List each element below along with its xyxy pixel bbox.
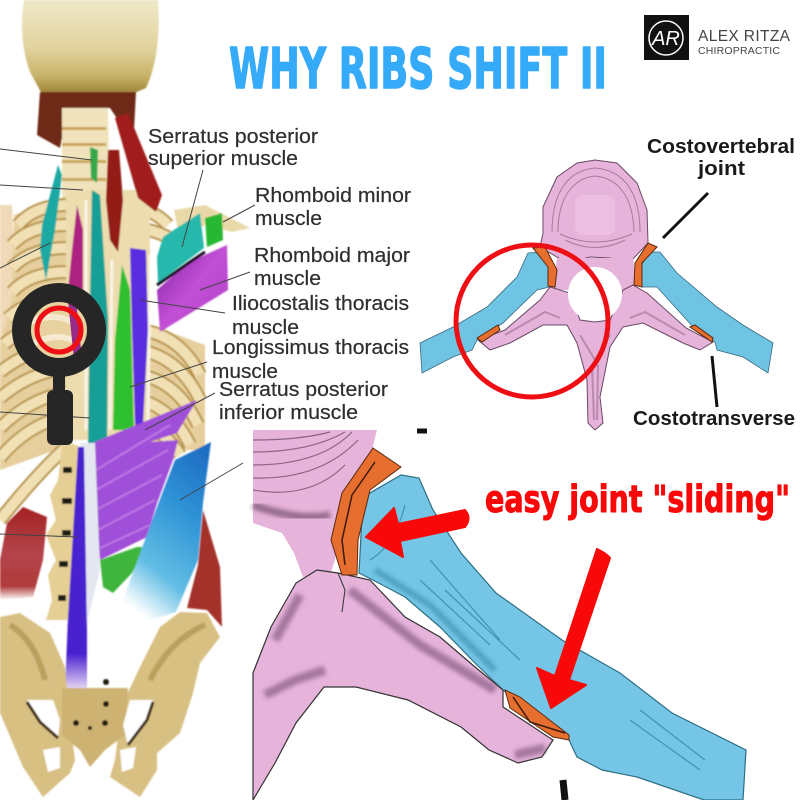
pelvis left: [0, 613, 75, 797]
logo mark: AR: [651, 28, 680, 50]
vertebral body and pedicle: [253, 430, 377, 577]
costotransverse joints: [477, 325, 500, 342]
lumbar spine: [46, 445, 78, 620]
rib backing: [0, 195, 70, 470]
red arrow: upper: [366, 508, 468, 557]
pedicles: [553, 258, 637, 290]
muscle labels: superior muscle: [148, 148, 298, 170]
logo mark: [644, 15, 689, 60]
muscle labels: Longissimus thoracis: [212, 337, 409, 359]
scapula top: [174, 205, 250, 240]
muscle: upper trapezius red: [115, 113, 162, 212]
red circle highlight: [456, 245, 608, 397]
arch and processes: [478, 285, 713, 430]
right ribs: [115, 205, 200, 455]
logo text: ALEX RITZA: [698, 28, 791, 45]
blue rib: [359, 475, 746, 800]
pelvic openings: [27, 700, 60, 738]
tick marks: [417, 431, 565, 800]
muscle labels: muscle: [232, 317, 299, 339]
white aponeurosis: [80, 443, 100, 630]
right rib: [640, 252, 773, 373]
joint labels: Costotransverse: [633, 408, 795, 430]
muscle: lower green: [100, 547, 147, 593]
muscle: teal left: [40, 165, 62, 280]
muscle labels: Rhomboid major: [254, 245, 410, 267]
left arm bone: [0, 205, 14, 345]
muscle: rhomboid minor: [157, 213, 204, 283]
muscle: green rhomboid tip: [205, 213, 223, 247]
panel: vertebra diagram: [420, 136, 795, 430]
muscle labels: Iliocostalis thoracis: [232, 293, 409, 315]
muscle labels: inferior muscle: [219, 402, 358, 424]
spinal canal: [568, 267, 622, 321]
joint labels: joint: [697, 158, 745, 180]
pelvis right: [110, 612, 220, 797]
cervical spine: [62, 108, 110, 200]
logo: Alex Ritza Chiropractic: [644, 15, 791, 60]
muscle labels: [148, 126, 411, 424]
muscle: teal centre: [88, 190, 108, 445]
muscle labels: Serratus posterior: [219, 379, 388, 401]
lens view of rib: [31, 302, 87, 357]
icon: magnifying glass: [22, 292, 96, 445]
thoracic spine: [66, 190, 150, 440]
muscle: central red: [106, 150, 123, 252]
muscle labels: Serratus posterior: [148, 126, 318, 148]
skeleton and muscles: [0, 0, 250, 797]
muscle: magenta: [68, 205, 83, 290]
costovertebral joints: [533, 247, 557, 287]
process shading: [265, 590, 545, 755]
muscle labels: muscle: [255, 208, 322, 230]
muscle labels: muscle: [212, 361, 278, 383]
transverse process: [253, 570, 553, 800]
joint labels: Costovertebral: [647, 136, 795, 158]
muscle: serratus posterior inferior: [92, 400, 197, 560]
logo text: CHIROPRACTIC: [698, 45, 780, 57]
logo text: [698, 28, 791, 57]
muscle labels: Rhomboid minor: [255, 185, 411, 207]
skull: [22, 0, 159, 94]
muscle: right red: [187, 510, 222, 627]
joint labels: [633, 136, 795, 430]
vertebral body: [540, 160, 648, 263]
muscle: rhomboid major: [157, 245, 228, 332]
muscle: latissimus blue: [123, 442, 211, 620]
panel: zoomed joint: [253, 430, 790, 800]
muscle: long violet: [130, 248, 148, 425]
left ribs: [0, 205, 72, 520]
orange joint facets: [331, 448, 401, 575]
muscle: long green: [113, 265, 134, 430]
leader lines: [663, 193, 708, 238]
muscle: left red: [0, 507, 47, 600]
muscle: small green: [90, 147, 98, 183]
title: WHY RIBS SHIFT II: [229, 37, 607, 102]
panel: back muscle anatomy: [0, 0, 411, 797]
leader lines: [0, 149, 255, 537]
sacrum: [62, 688, 128, 767]
muscle: violet lower strip: [65, 447, 87, 690]
left rib: [420, 252, 550, 373]
red arrow: lower: [537, 549, 610, 708]
muscle labels: muscle: [254, 268, 321, 290]
